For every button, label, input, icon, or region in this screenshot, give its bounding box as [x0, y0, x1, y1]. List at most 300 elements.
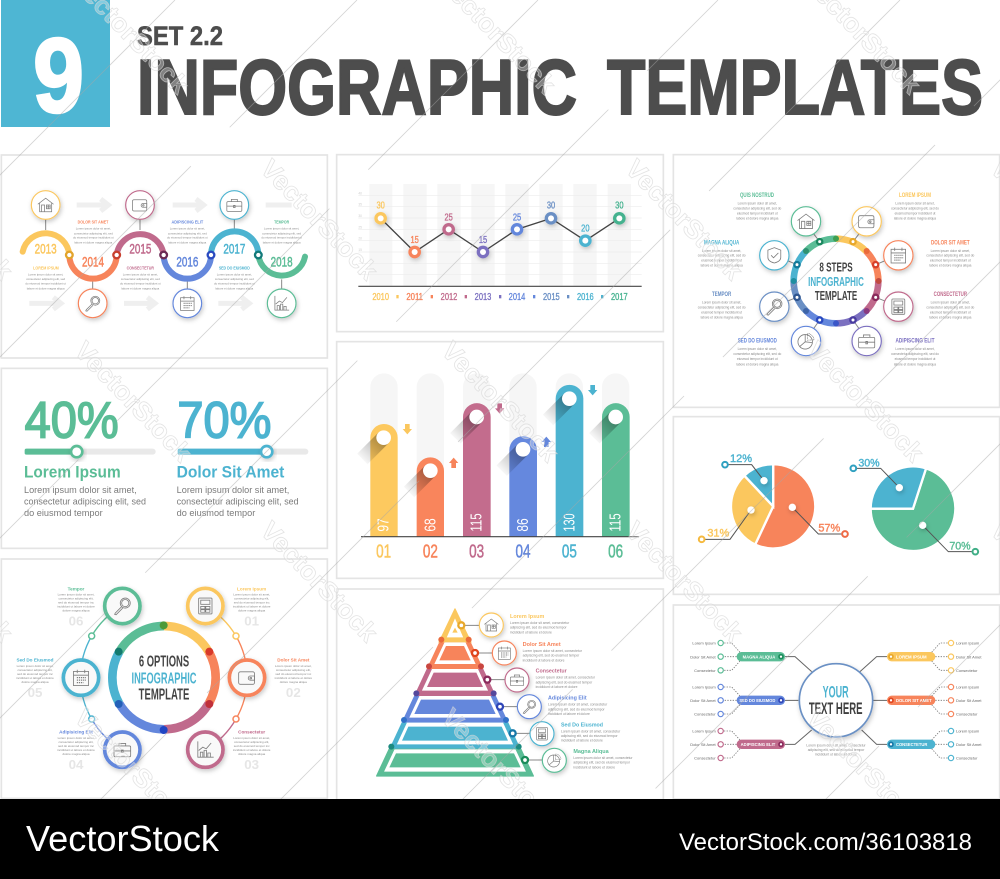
step captions: consectetur adipiscing elit, sed: [121, 277, 160, 281]
icon circles: [31, 191, 296, 318]
option captions: Tempor: [68, 586, 85, 591]
level captions: adipiscing elit, sed do eiusmod tempor: [536, 680, 593, 684]
category labels: 01: [376, 540, 391, 561]
footer brand: VectorStock: [26, 818, 220, 859]
level icons: [484, 619, 561, 767]
central circle: [799, 664, 873, 737]
step captions: DOLOR SIT AMET: [931, 240, 970, 246]
category labels: 04: [515, 540, 530, 561]
panel: line chart: [337, 155, 663, 332]
year labels: 2014: [509, 292, 526, 303]
option captions: 02: [286, 685, 301, 700]
pie chart two: [871, 466, 955, 551]
option captions: sed do eiusmod tempor inc: [275, 672, 312, 676]
leaf labels left: Consectetur: [694, 756, 716, 761]
data values: 30: [376, 201, 385, 212]
step captions: consectetur adipiscing elit, sed do: [891, 352, 939, 356]
panel: mind map: [673, 605, 1000, 799]
category labels: 02: [423, 540, 438, 561]
trend arrows: [403, 385, 597, 468]
title: [137, 43, 983, 131]
step captions: labore et dolore magna aliqua: [736, 362, 779, 366]
slider text: do eiusmod tempor: [177, 508, 255, 518]
watermark text: VectorStock: [69, 335, 198, 468]
option captions: Sed Do Eiusmod: [16, 658, 54, 663]
percent values: 40%: [25, 392, 119, 449]
step captions: labore et dolore magna aliqua: [701, 316, 743, 320]
icon circles: [760, 207, 913, 356]
junction dots: [66, 252, 262, 258]
slider text: do eiusmod tempor: [24, 508, 103, 518]
y axis labels: 20: [358, 237, 362, 241]
wave arcs: [23, 231, 305, 279]
bar tracks: [370, 373, 629, 537]
pill labels: DOLOR SIT AMET: [896, 698, 932, 703]
watermark text: VectorStock: [255, 515, 384, 648]
progress bars: [25, 446, 308, 457]
step captions: labore et dolore magna aliqua: [701, 264, 743, 268]
category labels: 06: [608, 540, 623, 561]
step captions: do eiusmod tempor incididunt ut: [167, 236, 208, 240]
step captions: eiusmod tempor incididunt ut: [930, 259, 971, 263]
years: 2014: [82, 254, 104, 270]
center title: [131, 654, 196, 703]
step captions: CONSECTETUR: [934, 292, 967, 298]
option captions: Lorem ipsum dolor sit amet,: [233, 593, 270, 597]
option captions: dolore magna aliqua: [238, 752, 266, 756]
step captions: eiusmod tempor incididunt ut: [737, 357, 778, 361]
level captions: incididunt ut labore et dolore: [548, 712, 590, 716]
step captions: eiusmod tempor incididunt ut: [737, 211, 778, 215]
step captions: Lorem ipsum dolor sit amet,: [895, 202, 935, 206]
center title: 6 OPTIONS: [139, 654, 189, 671]
year labels: 2012: [441, 292, 457, 303]
year labels: 2017: [611, 292, 628, 303]
level captions: adipiscing elit, sed do eiusmod tempor: [548, 707, 605, 711]
slider text: Lorem ipsum dolor sit amet,: [24, 485, 137, 495]
center title: [808, 260, 864, 303]
step captions: Lorem ipsum dolor sit amet,: [702, 249, 741, 253]
y axis labels: [358, 191, 362, 252]
leader end rings: [699, 462, 978, 554]
level captions: Dolor Sit Amet: [523, 642, 561, 648]
data values: 30: [615, 201, 623, 212]
panel: wavy timeline: [1, 155, 327, 358]
option captions: Lorem ipsum dolor sit amet,: [58, 593, 95, 597]
branch pills: [737, 652, 935, 749]
watermark text: VectorStock: [436, 702, 565, 835]
level captions: Adipisicing Elit: [548, 696, 587, 702]
dashed branches: [724, 643, 948, 758]
option captions: incididunt ut labore et dolore: [57, 748, 95, 752]
central caption: adipiscing elit, sed do eiusmod tempor: [808, 748, 865, 752]
percent values: [25, 392, 271, 449]
slider titles: Dolor Sit Amet: [177, 464, 285, 482]
step captions: do eiusmod tempor incididunt ut: [25, 282, 66, 286]
watermark text: VectorStock: [620, 515, 749, 648]
central caption: Lorem ipsum dolor sit amet, consectetur: [806, 743, 866, 747]
option captions: incididunt ut labore et dolore: [16, 676, 54, 680]
panel: percentage sliders: [1, 368, 327, 548]
central caption: incididunt ut labore et dolore: [815, 753, 857, 757]
leaf labels left: Consectetur: [694, 668, 716, 673]
level captions: Lorem ipsum dolor sit amet, consectetur: [548, 703, 608, 707]
years: 2013: [35, 240, 57, 256]
x axis: [358, 285, 642, 288]
level captions: incididunt ut labore et dolore: [523, 658, 565, 662]
pill labels: MAGNA ALIQUA: [743, 654, 776, 659]
number badge: 9: [33, 17, 84, 135]
step captions: do eiusmod tempor incididunt ut: [214, 282, 255, 286]
central text: TEXT HERE: [809, 699, 862, 718]
level captions: adipiscing elit, sed do eiusmod tempor: [573, 761, 631, 765]
long shadows: [357, 393, 621, 497]
option captions: consectetur adipiscing elit,: [58, 597, 94, 601]
step captions: labore et dolore magna aliqua: [929, 264, 972, 268]
step captions: consectetur adipiscing elit, sed do: [733, 206, 781, 210]
trend line: [381, 218, 619, 252]
step captions: LOREM IPSUM: [33, 265, 59, 270]
option captions: dolore magna aliqua: [238, 609, 266, 613]
panel: bar chart: [337, 342, 663, 578]
pyramid levels: [377, 609, 533, 776]
option captions: 06: [69, 614, 83, 629]
year labels: [372, 292, 628, 303]
data points: [376, 214, 624, 257]
side dots: [388, 637, 522, 750]
option captions: sed do eiusmod tempor inc: [58, 601, 94, 605]
step captions: consectetur adipiscing elit, sed do: [733, 352, 781, 356]
watermark text: VectorStock: [620, 153, 749, 286]
year labels: 2013: [475, 292, 491, 303]
pill dots: [779, 655, 893, 746]
leaf labels right: Dolor Sit Amet: [956, 698, 982, 703]
icons: [767, 214, 906, 349]
pill labels: ADIPISCING ELIT: [741, 742, 776, 747]
header: [1, 0, 983, 135]
pill labels: SED DO EIUSMOD: [739, 698, 775, 703]
option captions: Lorem ipsum dolor sit amet,: [17, 664, 54, 668]
step captions: Lorem ipsum dolor sit amet,: [76, 227, 111, 231]
step captions: SED DO EIUSMOD: [738, 338, 777, 344]
option captions: dolore magna aliqua: [280, 680, 307, 684]
step captions: labore et dolore magna aliqua: [894, 362, 936, 366]
step captions: DOLOR SIT AMET: [78, 219, 108, 224]
step captions: Lorem ipsum dolor sit amet,: [931, 249, 970, 253]
years: [35, 240, 293, 270]
option captions: Lorem ipsum dolor sit amet,: [275, 664, 312, 668]
leaf labels left: Consectetur: [694, 712, 716, 717]
data values: [376, 201, 623, 246]
option captions: consectetur adipiscing elit,: [17, 668, 53, 672]
percent values: 70%: [177, 392, 271, 449]
leader lines: [705, 465, 972, 552]
panel: 6 options ring: [1, 559, 327, 798]
step captions: consectetur adipiscing elit, sed do: [698, 254, 746, 258]
center title: TEMPLATE: [815, 288, 857, 303]
option captions: consectetur adipiscing elit,: [234, 597, 269, 601]
pill labels: CONSECTETUR: [896, 742, 928, 747]
step captions: consectetur adipiscing elit, sed do: [698, 305, 746, 309]
step captions: Lorem ipsum dolor sit amet,: [895, 347, 935, 351]
leaf labels right: Lorem Ipsum: [956, 685, 980, 690]
level captions: [510, 614, 633, 769]
data values: 15: [410, 235, 419, 246]
number badge: [1, 0, 110, 135]
center title: TEMPLATE: [139, 686, 189, 703]
segment dots: [791, 236, 882, 326]
percent labels: 70%: [949, 541, 971, 553]
step captions: TEMPOR: [712, 292, 732, 298]
ring dots: [115, 621, 213, 734]
leaf labels right: [956, 641, 982, 761]
option captions: sed do eiusmod tempor inc: [58, 744, 94, 748]
option captions: Lorem Ipsum: [237, 586, 266, 591]
step captions: SED DO EIUSMOD: [219, 265, 250, 270]
step captions: labore et dolore magna aliqua: [894, 216, 936, 220]
option captions: sed do eiusmod tempor inc: [234, 744, 270, 748]
leaf labels left: Lorem Ipsum: [692, 729, 716, 734]
option captions: sed do eiusmod tempor inc: [234, 601, 270, 605]
panel: 8 steps ring: [673, 155, 1000, 407]
step captions: consectetur adipiscing elit, sed: [215, 277, 254, 281]
option captions: Lorem ipsum dolor sit amet,: [58, 736, 95, 740]
slider titles: [24, 464, 285, 482]
leaf rings: [718, 640, 954, 761]
option captions: 01: [244, 614, 260, 629]
level captions: Consectetur: [536, 669, 567, 675]
step captions: eiusmod tempor incididunt ut: [895, 211, 935, 215]
step captions: consectetur adipiscing elit, sed do: [891, 206, 939, 210]
step captions: ADIPISCING ELIT: [171, 219, 203, 224]
option captions: incididunt ut labore et dolore: [275, 676, 312, 680]
slider titles: Lorem Ipsum: [24, 464, 121, 482]
panel: pie charts: [673, 417, 1000, 594]
title: INFOGRAPHIC: [137, 43, 577, 131]
years: 2017: [223, 240, 245, 256]
option captions: incididunt ut labore et dolore: [233, 605, 271, 609]
step captions: consectetur adipiscing elit, sed do: [926, 254, 974, 258]
main connectors: [785, 657, 887, 744]
option icons: [73, 598, 254, 757]
step captions: eiusmod tempor incididunt ut: [895, 357, 935, 361]
step captions: eiusmod tempor incididunt ut: [701, 310, 742, 314]
main ring: [112, 626, 216, 729]
step captions: CONSECTETUR: [127, 265, 154, 270]
step captions: Lorem ipsum dolor sit amet,: [28, 272, 64, 276]
level captions: adipiscing elit, sed do eiusmod tempor: [510, 626, 567, 630]
level captions: Lorem ipsum dolor sit amet, consectetur: [536, 676, 596, 680]
level captions: adipiscing elit, sed do eiusmod tempor: [523, 654, 580, 658]
step captions: labore et dolore magna aliqua: [74, 240, 113, 244]
data values: 15: [479, 235, 487, 246]
option captions: 05: [28, 685, 43, 700]
step captions: consectetur adipiscing elit, sed: [26, 277, 66, 281]
grid lines: [358, 195, 642, 275]
step captions: labore et dolore magna aliqua: [168, 240, 207, 244]
center title: INFOGRAPHIC: [808, 274, 864, 289]
option captions: sed do eiusmod tempor inc: [17, 672, 53, 676]
icons: [38, 198, 289, 311]
slider text: [24, 485, 299, 518]
slider text: consectetur adipiscing elit, sed: [177, 497, 299, 507]
data values: 25: [444, 212, 453, 223]
leaf labels right: Lorem Ipsum: [956, 729, 980, 734]
watermark text: VectorStock: [69, 702, 198, 835]
leaf labels right: Dolor Sit Amet: [956, 654, 982, 659]
ring segments: [794, 239, 878, 323]
level captions: incididunt ut labore et dolore: [536, 685, 578, 689]
step captions: ADIPISCING ELIT: [895, 338, 935, 344]
footer bar: [0, 799, 1000, 879]
watermark text: VectorStock: [801, 702, 930, 835]
step captions: consectetur adipiscing elit, sed: [262, 231, 302, 235]
step captions: labore et dolore magna aliqua: [215, 286, 254, 290]
leaf labels left: Lorem Ipsum: [692, 685, 716, 690]
step captions: do eiusmod tempor incididunt ut: [261, 236, 302, 240]
leader lines: [461, 625, 542, 760]
leaf labels right: Dolor Sit Amet: [956, 742, 982, 747]
slider text: Lorem ipsum dolor sit amet,: [177, 485, 289, 495]
watermark text: VectorStock: [255, 153, 384, 286]
leaf labels left: [690, 641, 717, 761]
percent labels: 30%: [858, 458, 880, 470]
column bands: [369, 184, 631, 286]
step captions: Lorem ipsum dolor sit amet,: [738, 347, 777, 351]
percent labels: 31%: [707, 528, 730, 540]
step captions: TEMPOR: [274, 219, 290, 224]
option captions: consectetur adipiscing elit,: [276, 668, 311, 672]
step captions: LOREM IPSUM: [899, 193, 931, 199]
step captions: labore et dolore magna aliqua: [736, 216, 779, 220]
step captions: Lorem ipsum dolor sit amet,: [123, 272, 158, 276]
step captions: labore et dolore magna aliqua: [929, 316, 972, 320]
step captions: Lorem ipsum dolor sit amet,: [217, 272, 252, 276]
year labels: 2015: [543, 292, 560, 303]
step captions: MAGNA ALIQUA: [704, 240, 740, 246]
level captions: Lorem ipsum dolor sit amet, consectetur: [510, 621, 570, 625]
step captions: [25, 219, 302, 290]
leaf labels left: Lorem Ipsum: [692, 641, 716, 646]
level captions: adipiscing elit, sed do eiusmod tempor: [561, 734, 618, 738]
bar values: 86: [515, 518, 532, 532]
leaf labels left: Dolor Sit Amet: [690, 742, 717, 747]
background arrows: [29, 199, 292, 309]
bars: [370, 385, 630, 537]
year labels: 2011: [406, 292, 423, 303]
y axis labels: 35: [358, 203, 362, 207]
y axis labels: 25: [358, 225, 362, 229]
connectors: [46, 219, 282, 289]
option captions: Lorem ipsum dolor sit amet,: [233, 736, 270, 740]
bar values: 68: [422, 518, 439, 532]
step captions: Lorem ipsum dolor sit amet,: [170, 227, 205, 231]
pill labels: LOREM IPSUM: [896, 654, 927, 659]
step captions: labore et dolore magna aliqua: [263, 240, 301, 244]
years: 2015: [129, 240, 151, 256]
level captions: Lorem ipsum dolor sit amet, consectetur: [523, 649, 583, 653]
arc rings: [89, 633, 239, 722]
year labels: 2010: [372, 292, 389, 303]
option captions: dolore magna aliqua: [62, 609, 90, 613]
option captions: dolore magna aliqua: [21, 680, 49, 684]
year labels: 2016: [577, 292, 594, 303]
small markers: [396, 295, 603, 298]
step captions: eiusmod tempor incididunt ut: [930, 310, 971, 314]
option circles: [63, 588, 265, 767]
category labels: 03: [469, 540, 484, 561]
step captions: do eiusmod tempor incididunt ut: [120, 282, 161, 286]
axis: [361, 535, 639, 538]
leaf labels right: Consectetur: [956, 668, 978, 673]
leaf labels left: Dolor Sit Amet: [690, 654, 717, 659]
y axis labels: 40: [358, 191, 362, 195]
pie chart one: [731, 464, 815, 548]
bar values: 115: [469, 513, 486, 532]
percent labels: 12%: [730, 453, 752, 465]
step captions: Lorem ipsum dolor sit amet,: [702, 301, 741, 305]
data values: 20: [581, 224, 589, 235]
bar values: 130: [561, 513, 578, 532]
panel: pyramid: [337, 589, 663, 800]
level captions: incididunt ut labore et dolore: [561, 739, 603, 743]
slider text: consectetur adipiscing elit, sed: [24, 497, 146, 507]
bar values: 115: [608, 513, 625, 532]
level captions: Lorem ipsum dolor sit amet, consectetur: [573, 756, 633, 760]
option captions: Adipisicing Elit: [59, 730, 93, 735]
option captions: dolore magna aliqua: [62, 752, 90, 756]
central text: YOUR: [823, 683, 849, 702]
step captions: consectetur adipiscing elit, sed: [74, 231, 113, 235]
option captions: Consectetur: [238, 730, 265, 735]
y axis labels: 15: [358, 248, 362, 252]
option captions: 04: [69, 757, 84, 772]
option captions: [16, 586, 312, 772]
y axis labels: 30: [358, 214, 362, 218]
option captions: incididunt ut labore et dolore: [233, 748, 271, 752]
years: 2016: [176, 254, 198, 270]
outer arc links: [80, 606, 247, 750]
bar knobs: [376, 391, 623, 478]
watermark text: VectorStock: [436, 335, 565, 468]
level captions: Magna Aliqua: [573, 749, 609, 755]
level circles: [479, 613, 566, 772]
data values: 30: [547, 201, 555, 212]
percent labels: 57%: [818, 523, 841, 535]
level rings: [458, 622, 528, 763]
step captions: consectetur adipiscing elit, sed do: [926, 305, 974, 309]
option captions: consectetur adipiscing elit,: [234, 740, 269, 744]
option captions: 03: [244, 757, 259, 772]
step captions: Lorem ipsum dolor sit amet,: [931, 301, 970, 305]
slice knobs: [747, 477, 926, 529]
footer url: VectorStock.com/36103818: [679, 829, 972, 856]
step captions: [698, 193, 974, 366]
center title: INFOGRAPHIC: [131, 670, 196, 687]
center white disc: [116, 629, 212, 726]
level captions: Sed Do Eiusmod: [561, 722, 603, 728]
watermark text: VectorStock: [801, 335, 930, 468]
percent labels: [707, 453, 971, 553]
level captions: incididunt ut labore et dolore: [573, 765, 615, 769]
step captions: labore et dolore magna aliqua: [27, 286, 65, 290]
step captions: eiusmod tempor incididunt ut: [701, 259, 742, 263]
pill labels: [739, 654, 932, 747]
white ring dots: [794, 239, 878, 323]
central text: [809, 683, 862, 718]
leaf labels right: Consectetur: [956, 712, 978, 717]
option captions: incididunt ut labore et dolore: [57, 605, 95, 609]
